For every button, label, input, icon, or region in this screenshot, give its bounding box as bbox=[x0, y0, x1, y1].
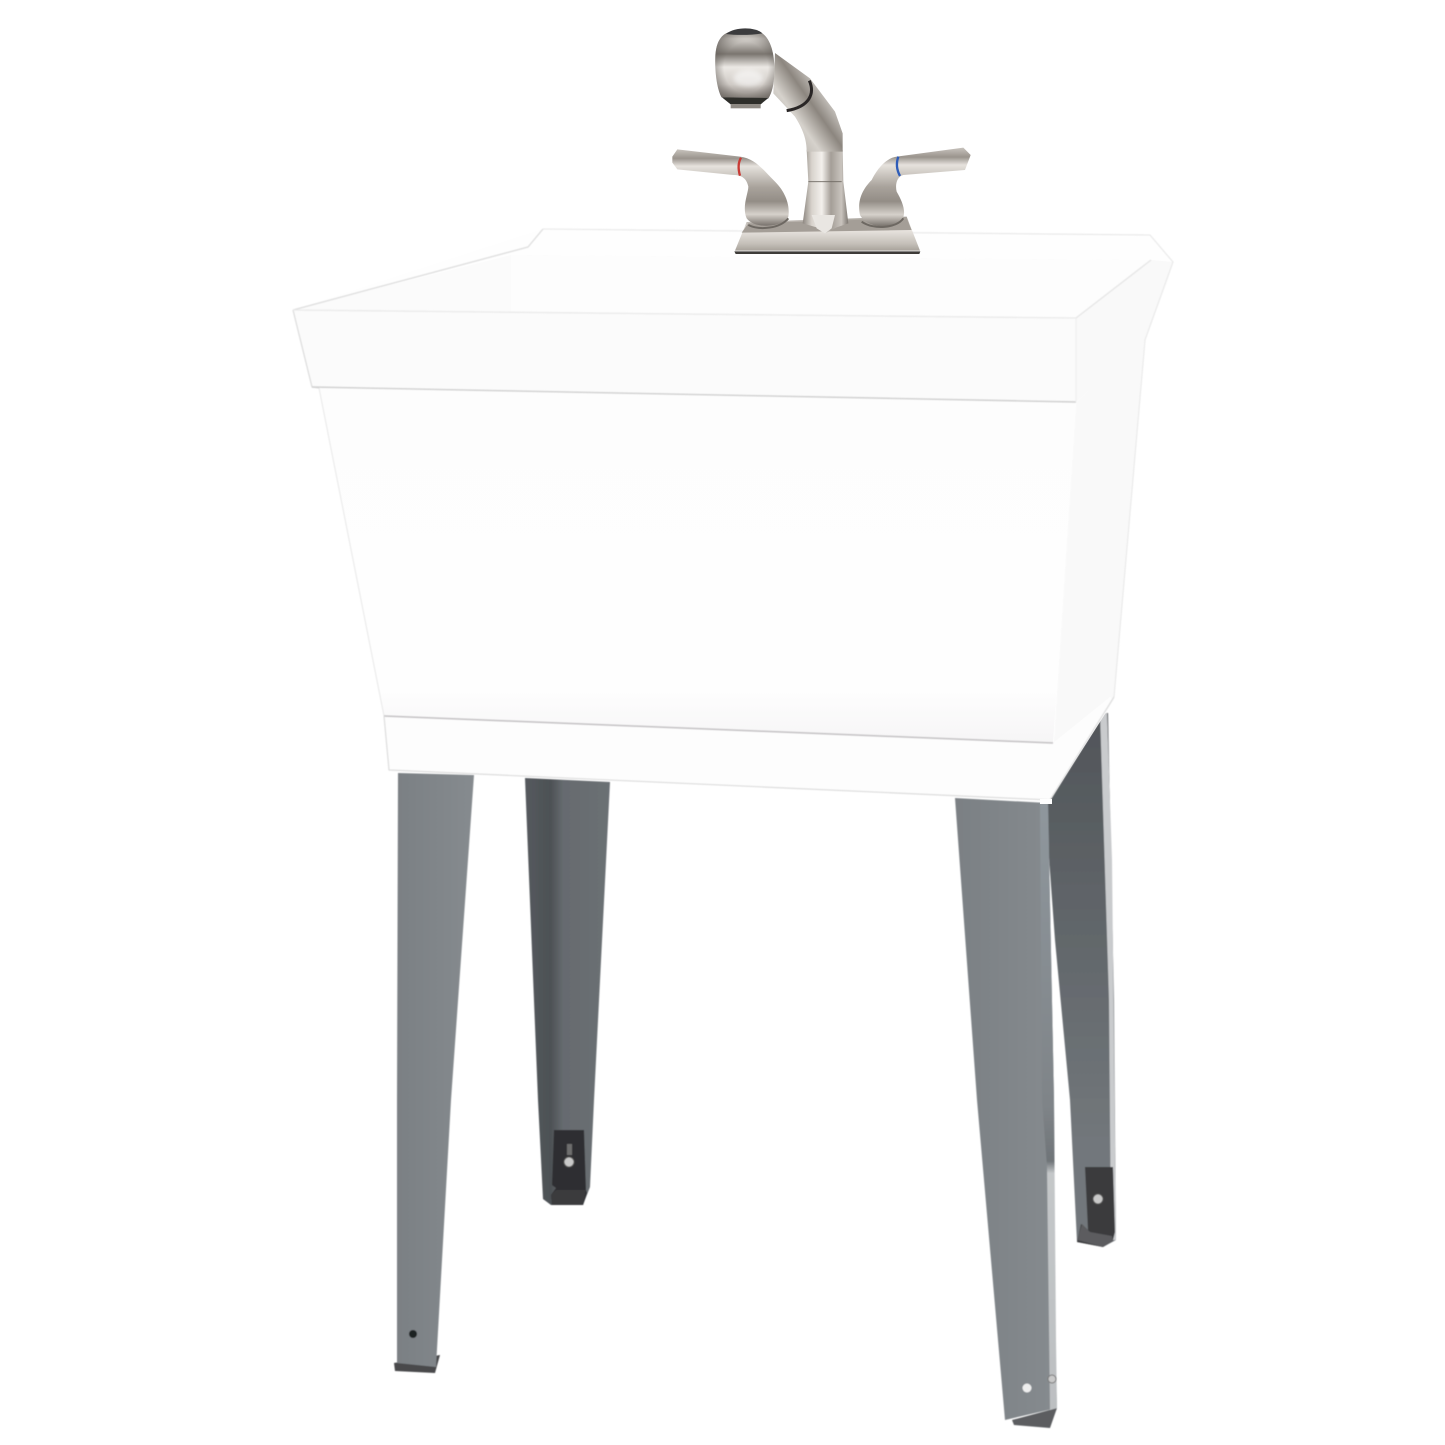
tub outlines bbox=[293, 229, 1173, 800]
back left leg bbox=[525, 778, 610, 1205]
foot bracket bbox=[551, 1130, 587, 1205]
front right leg bbox=[955, 798, 1057, 1428]
faucet bbox=[672, 28, 971, 254]
spray head bbox=[715, 28, 774, 108]
cold handle bbox=[859, 148, 971, 227]
right rim bbox=[1076, 260, 1173, 402]
back right leg bbox=[1045, 713, 1116, 1247]
spout column bbox=[803, 144, 848, 233]
foot bracket bbox=[1077, 1167, 1115, 1247]
sink basin interior bbox=[293, 255, 1151, 318]
black ring bbox=[787, 81, 811, 111]
base plate bbox=[734, 217, 920, 254]
spout neck bbox=[773, 53, 843, 152]
front left leg bbox=[394, 773, 474, 1373]
tub front face bbox=[319, 388, 1076, 743]
lower band bbox=[384, 697, 1114, 800]
sink tub bbox=[293, 229, 1173, 804]
back deck bbox=[293, 229, 1173, 338]
front rim bbox=[293, 310, 1076, 402]
legs bbox=[394, 713, 1116, 1428]
hot handle bbox=[672, 149, 789, 228]
right side of tub bbox=[1050, 335, 1145, 800]
